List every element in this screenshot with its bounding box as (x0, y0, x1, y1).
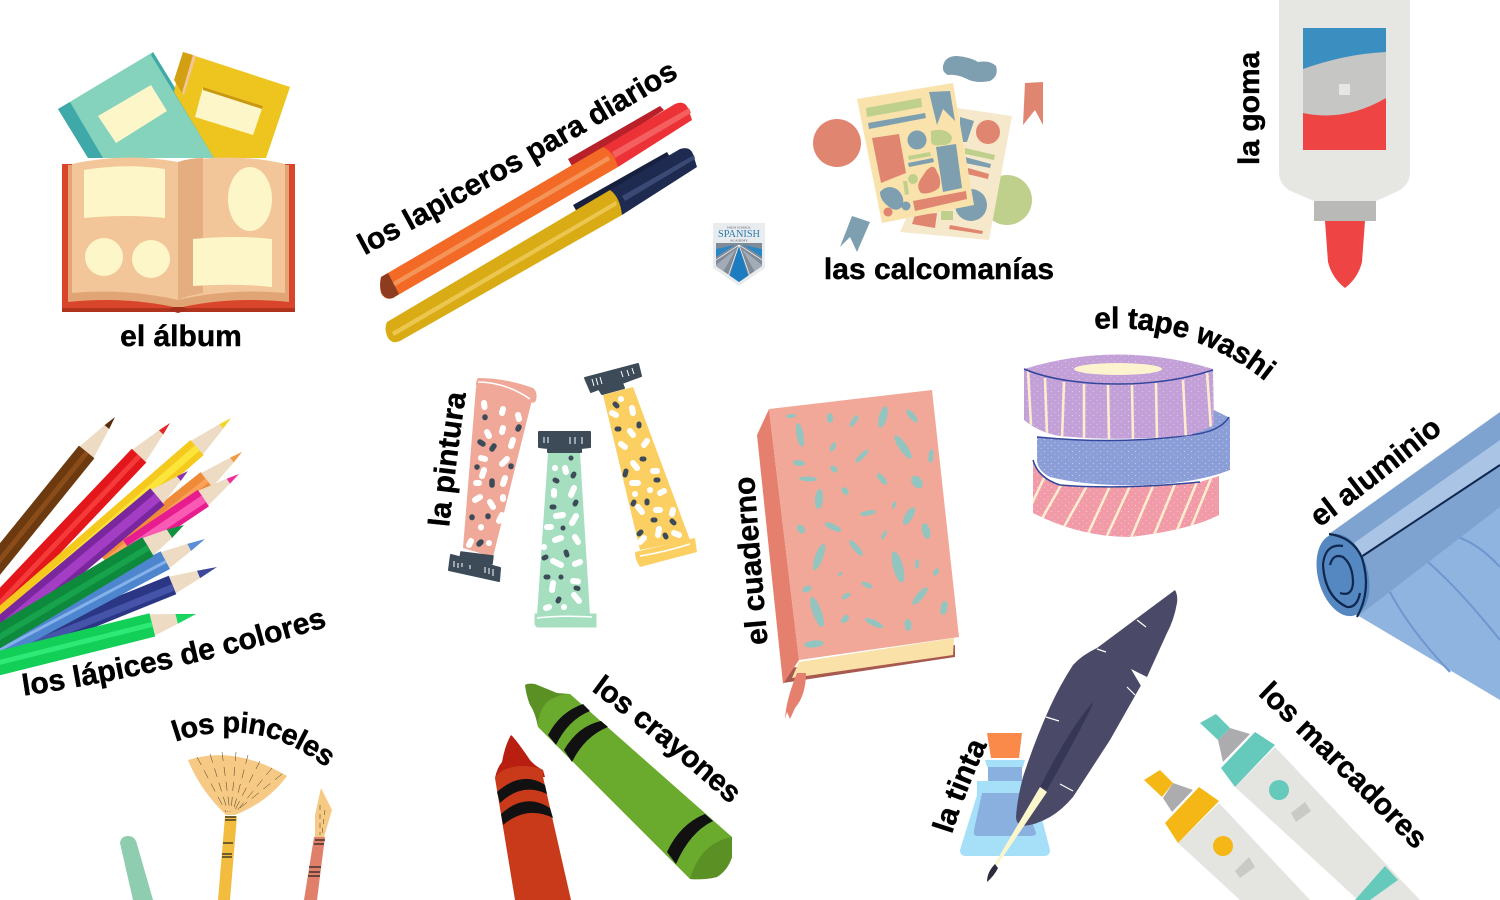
icon: journaling pens (380, 103, 697, 342)
teal marker (1200, 714, 1420, 900)
dark green pencil (0, 516, 190, 664)
feather notches (1046, 620, 1146, 791)
icon: crayons (495, 684, 732, 900)
quill shaft (1040, 702, 1093, 790)
label: los crayones: los crayones (592, 674, 738, 802)
logo: Spanish academy shield: ACADEMY (730, 238, 748, 242)
roll edge line (1361, 465, 1500, 557)
label: los lapiceros para diarios: los lapiceros para diarios (356, 65, 677, 255)
blue tape (1033, 410, 1230, 487)
page block (792, 638, 954, 678)
magenta pencil (123, 466, 245, 557)
foil highlight (1354, 440, 1500, 556)
quill nib (994, 787, 1047, 867)
feather (1016, 590, 1177, 826)
label: el tape washi: el tape washi (1095, 306, 1278, 380)
icon: stickers (813, 56, 1043, 252)
roll end (1308, 528, 1378, 622)
label: el cuaderno: el cuaderno (737, 478, 768, 644)
purple tape (1024, 354, 1214, 440)
icon: notebook (757, 390, 959, 719)
small bookmark sticker (840, 216, 870, 252)
small pointed brush (304, 788, 332, 900)
sheet creases (1390, 537, 1500, 672)
spiral (1323, 534, 1366, 617)
icon: aluminum foil roll (1308, 412, 1500, 700)
logo: Spanish academy shield (713, 223, 765, 286)
icon: paint brushes (120, 752, 332, 900)
pink tape (1028, 460, 1219, 540)
yellow album (174, 52, 290, 158)
orange pencil (99, 444, 248, 569)
cork (987, 733, 1022, 758)
icon: paint tubes (449, 364, 697, 627)
label: la tinta: la tinta (932, 741, 988, 833)
pink tube (449, 378, 537, 581)
bottle body (1279, 0, 1410, 201)
label: los lápices de colores: los lápices de colores (22, 612, 326, 696)
nozzle (1314, 201, 1376, 221)
circle sticker (813, 119, 861, 167)
foil sheet (1357, 480, 1500, 700)
yellow marker (1144, 770, 1310, 900)
label: la pintura: la pintura (427, 392, 466, 526)
icon: colored pencils (0, 410, 248, 678)
icon: ink bottle and quill (960, 590, 1177, 882)
back sticker sheet (900, 108, 1012, 240)
open album (62, 157, 295, 313)
icon: glue bottle (1279, 0, 1410, 288)
red pencil (0, 416, 177, 637)
yellow pen (386, 148, 697, 342)
red crayon (495, 735, 571, 900)
front sticker sheet (857, 83, 974, 223)
green album (58, 52, 218, 158)
purple pencil (0, 463, 195, 640)
brown pencil (0, 411, 123, 598)
bottle label (1303, 28, 1386, 150)
fan brush (188, 752, 287, 900)
icon: markers (1144, 714, 1420, 900)
red tip (1325, 221, 1365, 288)
back cover edge (783, 645, 955, 683)
ribbon (785, 673, 806, 719)
navy pencil (2, 558, 221, 662)
yellow pencil (0, 410, 238, 652)
quill tip (987, 864, 998, 882)
cover speckles (786, 405, 949, 648)
yellow tube (585, 364, 697, 567)
bright green pencil (0, 602, 199, 678)
logo: Spanish academy shield: HIGH SCHOOL (727, 226, 751, 230)
roll body (1329, 412, 1500, 617)
green brush handle (120, 836, 153, 900)
sticker blob (943, 56, 997, 82)
icon: washi tape rolls (1024, 354, 1230, 540)
label: el álbum: el álbum (120, 320, 242, 353)
label: los marcadores: los marcadores (1258, 680, 1424, 848)
label: las calcomanías: las calcomanías (824, 253, 1054, 286)
spine (757, 409, 799, 684)
label: la goma: la goma (1233, 51, 1266, 165)
orange pen (380, 103, 692, 299)
bookmark sticker (1023, 82, 1043, 125)
label: el aluminio: el aluminio (1313, 422, 1440, 525)
blue pencil (0, 530, 210, 672)
label: los pinceles: los pinceles (170, 712, 333, 766)
icon: photo albums (58, 52, 295, 313)
green tube (535, 432, 596, 627)
green circle sticker (982, 175, 1032, 225)
green crayon (525, 684, 732, 879)
logo: Spanish academy shield: SPANISH (718, 229, 760, 240)
front cover (769, 390, 959, 660)
bottle (960, 760, 1050, 856)
